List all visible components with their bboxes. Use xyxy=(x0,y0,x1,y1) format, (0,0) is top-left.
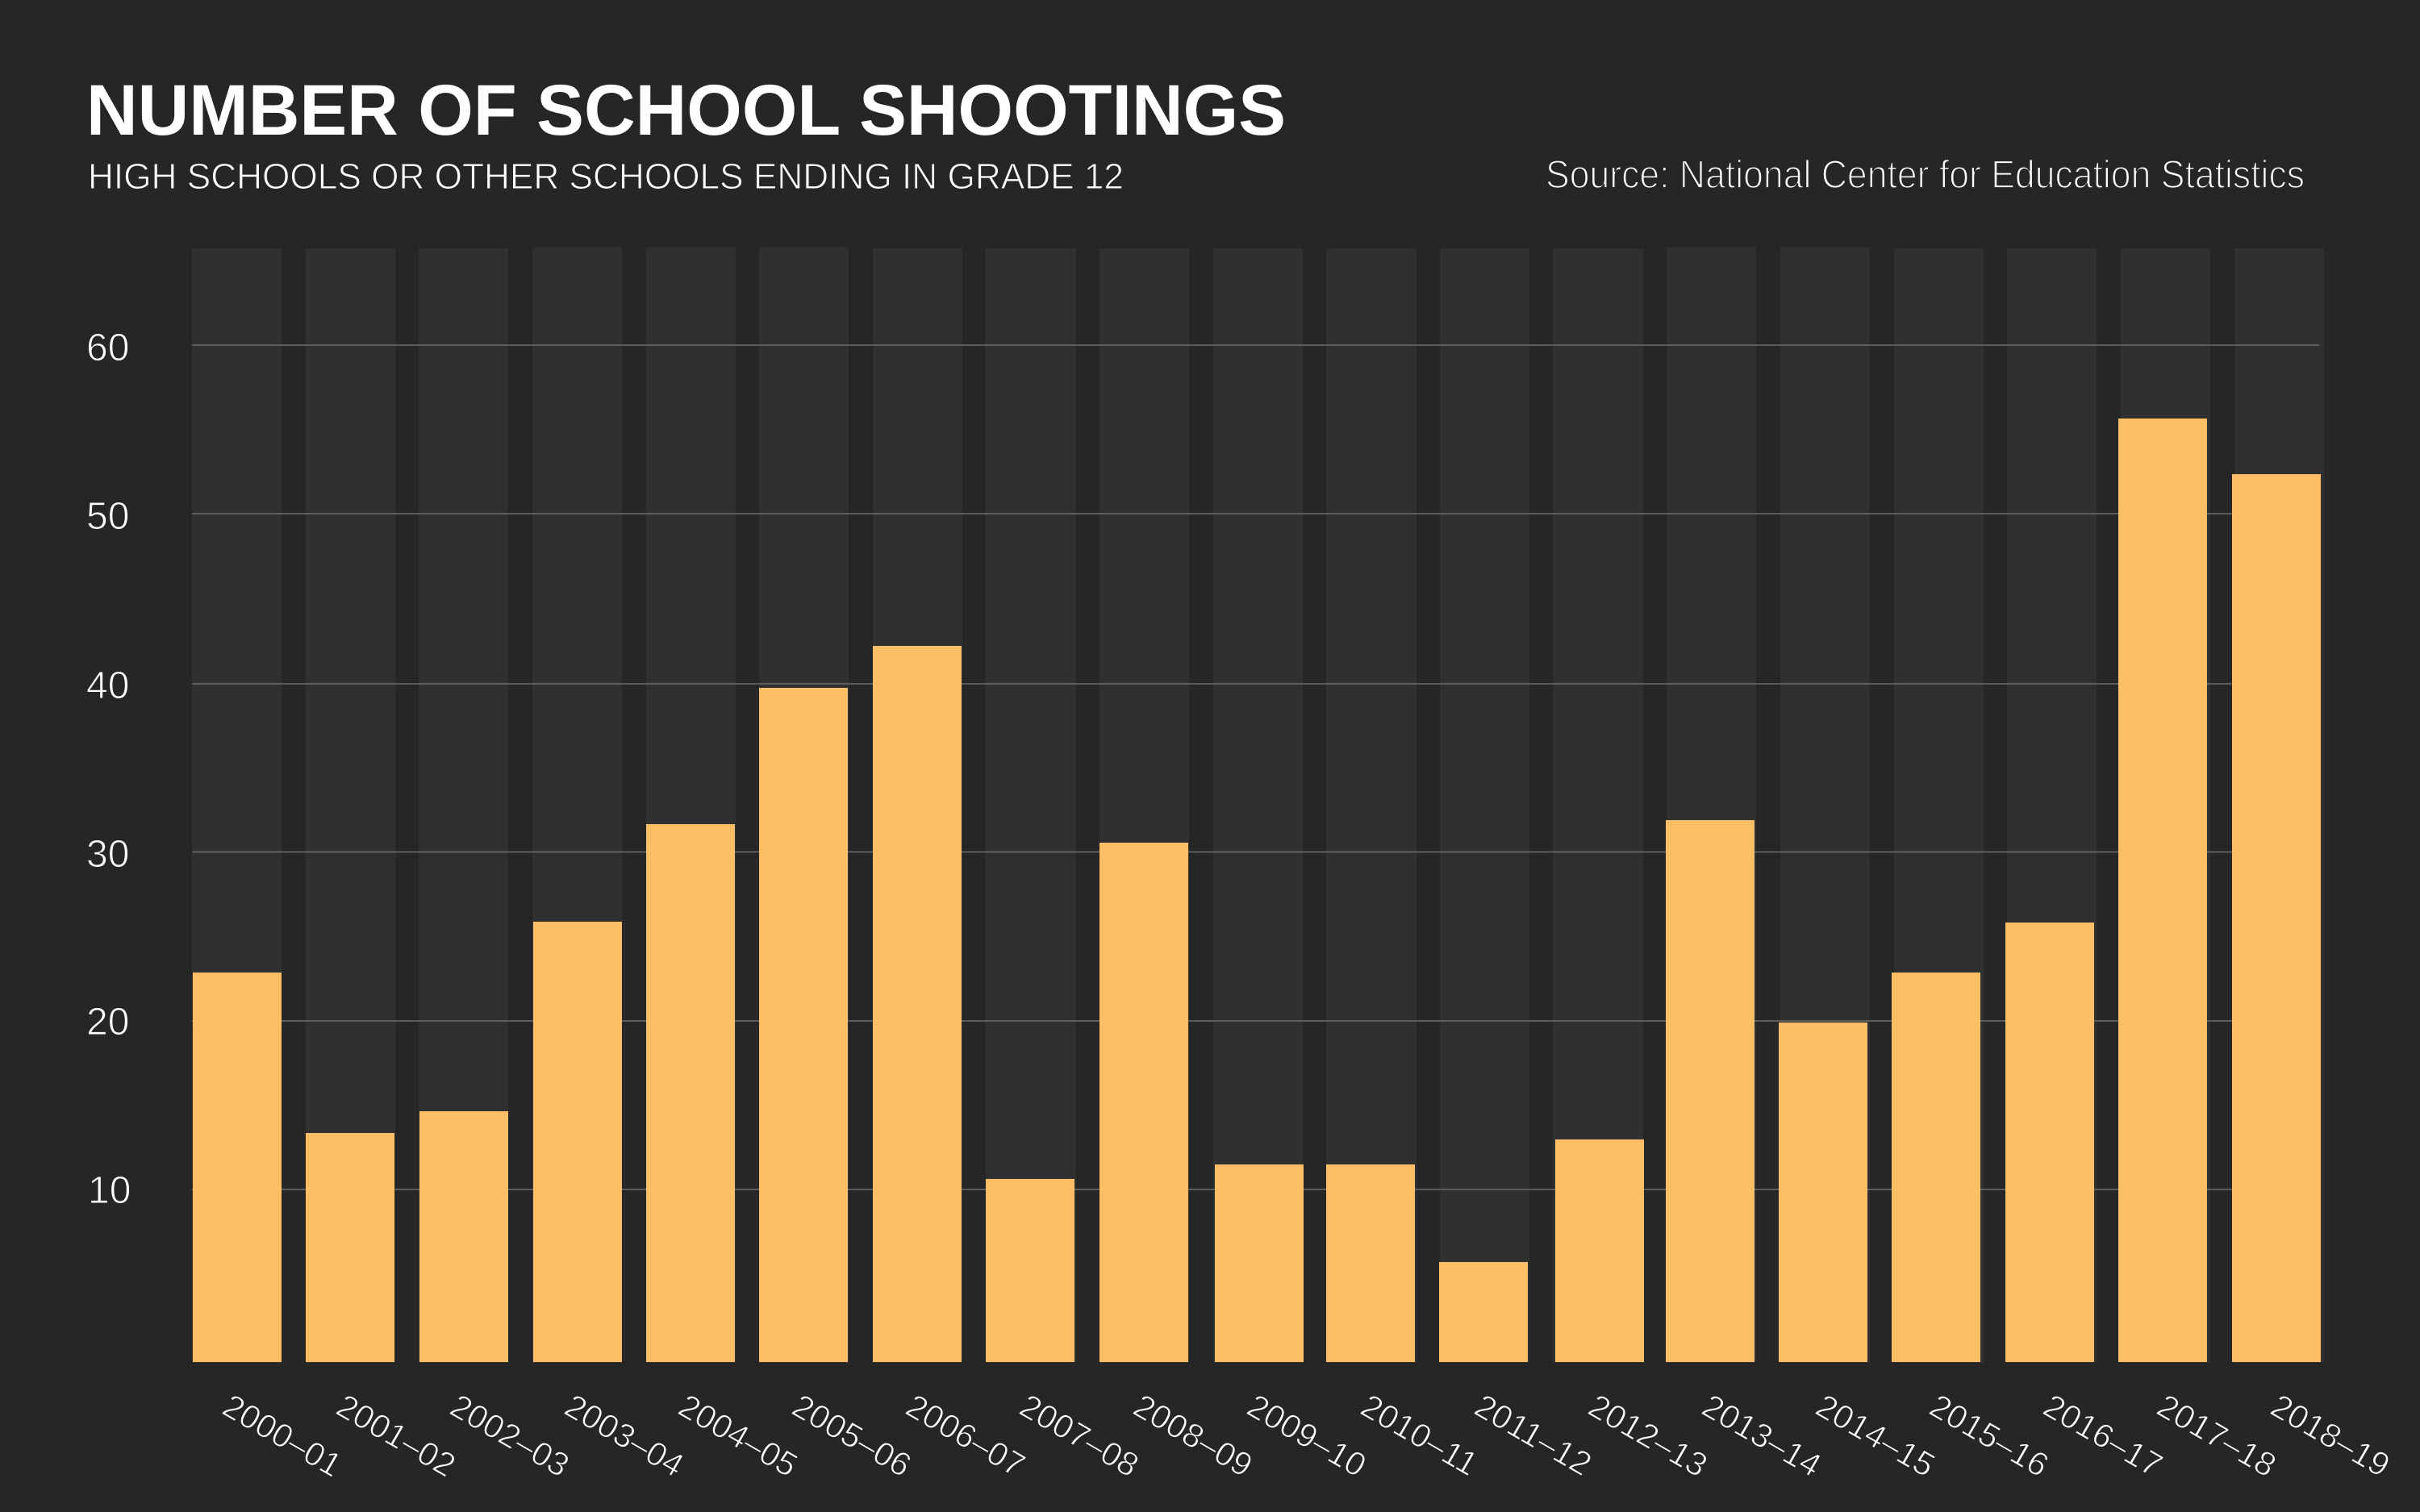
x-axis labels: 2010–11 xyxy=(1355,1386,1484,1483)
x-axis labels: 2001–02 xyxy=(331,1386,462,1485)
x-axis labels: 2013–14 xyxy=(1696,1386,1828,1485)
x-axis labels: 2018–19 xyxy=(2265,1386,2397,1485)
source note: Source: National Center for Education Statistics xyxy=(1546,153,2305,197)
x-axis labels xyxy=(216,1386,2397,1485)
bar: 2018–19 xyxy=(2232,474,2321,1362)
y-axis labels: 50 xyxy=(86,495,129,538)
bar: 2006–07 xyxy=(873,646,962,1362)
bar: 2007–08 xyxy=(986,1179,1074,1362)
background columns xyxy=(192,248,2324,1363)
bar: 2002–03 xyxy=(419,1111,508,1362)
x-axis labels: 2016–17 xyxy=(2038,1386,2169,1485)
x-axis labels: 2003–04 xyxy=(558,1386,691,1485)
x-axis labels: 2012–13 xyxy=(1583,1386,1714,1485)
bar: 2008–09 xyxy=(1099,843,1188,1362)
bar: 2003–04 xyxy=(533,922,622,1362)
subtitle: HIGH SCHOOLS OR OTHER SCHOOLS ENDING IN GRADE 12 xyxy=(88,156,1124,197)
bar: 2010–11 xyxy=(1326,1164,1415,1362)
bar: 2014–15 xyxy=(1779,1023,1867,1362)
x-axis labels: 2014–15 xyxy=(1810,1386,1942,1485)
bar chart xyxy=(86,248,2397,1485)
bar: 2016–17 xyxy=(2005,923,2094,1362)
bar: 2015–16 xyxy=(1892,973,1980,1362)
bar: 2004–05 xyxy=(646,824,735,1362)
x-axis labels: 2015–16 xyxy=(1923,1386,2055,1485)
title: NUMBER OF SCHOOL SHOOTINGS xyxy=(86,69,1286,150)
x-axis labels: 2000–01 xyxy=(216,1386,348,1485)
bar: 2000–01 xyxy=(193,973,282,1362)
bar: 2017–18 xyxy=(2118,419,2207,1362)
x-axis labels: 2011–12 xyxy=(1468,1386,1598,1483)
x-axis labels: 2002–03 xyxy=(444,1386,576,1485)
bar: 2012–13 xyxy=(1555,1139,1644,1362)
y-axis labels: 60 xyxy=(86,327,129,369)
bar: 2009–10 xyxy=(1215,1164,1304,1362)
y-axis labels: 40 xyxy=(86,664,129,707)
x-axis labels: 2017–18 xyxy=(2151,1386,2283,1485)
y-axis labels xyxy=(86,327,131,1212)
x-axis labels: 2005–06 xyxy=(786,1386,918,1485)
x-axis labels: 2007–08 xyxy=(1013,1386,1145,1485)
x-axis labels: 2006–07 xyxy=(900,1386,1032,1485)
y-axis labels: 20 xyxy=(86,1001,129,1043)
x-axis labels: 2009–10 xyxy=(1241,1386,1373,1485)
bar: 2001–02 xyxy=(306,1133,394,1362)
x-axis labels: 2004–05 xyxy=(673,1386,804,1485)
bar: 2005–06 xyxy=(759,688,848,1362)
y-axis labels: 10 xyxy=(88,1169,131,1212)
x-axis labels: 2008–09 xyxy=(1128,1386,1259,1485)
bar: 2013–14 xyxy=(1666,820,1754,1362)
bar: 2011–12 xyxy=(1439,1262,1528,1362)
orange value bars xyxy=(193,419,2321,1362)
y-axis labels: 30 xyxy=(86,833,129,876)
